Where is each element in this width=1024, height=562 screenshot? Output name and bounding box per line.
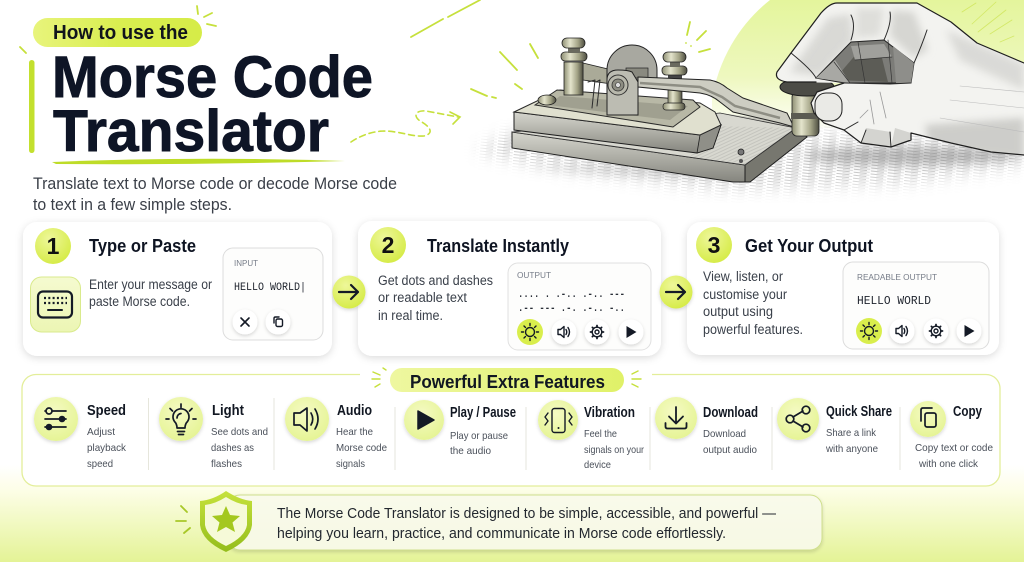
button: clear xyxy=(232,310,258,334)
step 2 text: or readable text xyxy=(378,290,467,305)
feature: quick share: with anyone xyxy=(825,443,878,455)
feature: play pause: Play / Pause xyxy=(450,405,516,421)
output box: .... . .-.. .-.. --- xyxy=(518,289,625,301)
bottom summary banner xyxy=(176,491,822,552)
step 3 heading: Get Your Output xyxy=(745,236,873,256)
output box: OUTPUT xyxy=(517,270,551,280)
banner text xyxy=(277,506,776,542)
feature: vibration: Vibration xyxy=(584,405,635,421)
step 3 text: output using xyxy=(703,304,773,319)
feature: copy xyxy=(910,401,993,470)
icon: keyboard xyxy=(30,277,80,332)
readable output box: HELLO WORLD xyxy=(857,294,931,308)
feature: quick share: Share a link xyxy=(826,427,877,439)
title block xyxy=(20,6,460,214)
accent bar xyxy=(29,60,34,153)
pill heading: how to use the xyxy=(33,18,202,47)
button: sound xyxy=(890,318,914,344)
feature: download: Download xyxy=(703,428,746,440)
subtitle: to text in a few simple steps. xyxy=(33,196,232,214)
arrow 1 xyxy=(332,276,366,308)
step 2 card xyxy=(358,221,661,356)
step 3 card xyxy=(687,222,999,355)
output box: .-- --- .-. .-.. -.. xyxy=(518,303,625,315)
icon: shield with star xyxy=(200,491,252,552)
subtitle: Translate text to Morse code or decode Morse code xyxy=(33,175,397,193)
step 2 text xyxy=(378,273,493,323)
telegraph key xyxy=(512,38,807,182)
button: light active xyxy=(517,319,543,345)
feature: speed: playback xyxy=(87,442,127,454)
feature: light: flashes xyxy=(211,458,242,470)
step 2 text: in real time. xyxy=(378,308,443,323)
hand shading xyxy=(925,118,1024,160)
button: copy xyxy=(266,310,290,334)
number badge 2 xyxy=(370,227,406,263)
feature: play pause: Play or pause xyxy=(450,430,508,442)
input box: INPUT xyxy=(234,258,258,268)
spark near pill xyxy=(20,6,216,53)
feature: light: dashes as xyxy=(211,442,254,454)
feature: download: Download xyxy=(703,405,758,421)
readable output box: READABLE OUTPUT xyxy=(857,272,937,282)
main title: Translator xyxy=(53,99,329,164)
feature: copy: Copy text or code xyxy=(915,442,993,454)
step 1 text: paste Morse code. xyxy=(89,294,190,309)
feature: light xyxy=(159,397,268,470)
table hatching xyxy=(480,126,1024,198)
number badge 2: 2 xyxy=(382,232,394,258)
number badge 1: 1 xyxy=(47,233,60,259)
hero illustration: telegraph key and hand xyxy=(411,0,1024,203)
feature: light: Light xyxy=(212,403,244,419)
input box: HELLO WORLD| xyxy=(234,282,306,294)
heading sparks xyxy=(372,368,641,387)
feature: speed: Adjust xyxy=(87,426,115,438)
sparks around key xyxy=(411,0,710,98)
banner text: The Morse Code Translator is designed to be simple, accessible, and powerful — xyxy=(277,506,776,522)
banner text: helping you learn, practice, and communicate in Morse code effortlessly. xyxy=(277,526,726,542)
feature: audio: signals xyxy=(336,458,365,470)
feature: quick share xyxy=(777,398,892,455)
step 2 heading: Translate Instantly xyxy=(427,236,569,256)
main title xyxy=(52,45,373,164)
feature: audio: Morse code xyxy=(336,442,387,454)
arrow 2 xyxy=(660,276,692,308)
number badge 1 xyxy=(35,228,71,264)
output box xyxy=(508,263,651,350)
step 1 heading: Type or Paste xyxy=(89,236,196,256)
dashed arrow xyxy=(351,111,460,142)
feature: light: See dots and xyxy=(211,426,268,438)
feature: quick share: Quick Share xyxy=(826,404,892,420)
feature: play pause: the audio xyxy=(450,445,491,457)
button: play xyxy=(956,318,982,344)
feature: speed: Speed xyxy=(87,403,126,419)
features heading pill: Powerful Extra Features xyxy=(410,372,605,392)
button: sound xyxy=(552,320,576,344)
feature: audio xyxy=(285,397,387,470)
step 3 text: View, listen, or xyxy=(703,269,783,284)
step 3 text: customise your xyxy=(703,287,787,302)
subtitle xyxy=(33,175,397,214)
feature: copy: Copy xyxy=(953,404,982,420)
brush underline xyxy=(52,159,345,164)
feature: vibration: Feel the xyxy=(584,428,617,440)
banner sparks xyxy=(176,506,190,533)
step 1 text xyxy=(89,277,212,309)
input box xyxy=(223,248,323,340)
number badge 3 xyxy=(696,227,732,263)
feature: speed xyxy=(34,397,127,470)
number badge 3: 3 xyxy=(708,232,720,258)
feature: copy: with one click xyxy=(918,458,979,470)
button: settings xyxy=(584,320,610,344)
knob xyxy=(780,78,834,136)
step 3 text xyxy=(703,269,803,337)
feature: audio: Hear the xyxy=(336,426,373,438)
button: play xyxy=(618,320,644,344)
feature: vibration: device xyxy=(584,459,611,471)
main title: Morse Code xyxy=(52,45,373,110)
feature: vibration xyxy=(538,400,644,471)
features panel xyxy=(22,368,1000,486)
step 2 text: Get dots and dashes xyxy=(378,273,493,288)
feature: speed: speed xyxy=(87,458,113,470)
feature: play pause xyxy=(404,400,516,457)
feature: vibration: signals on your xyxy=(584,444,644,456)
hand xyxy=(776,3,1024,160)
pill heading: how to use the: How to use the xyxy=(53,22,188,44)
feature: download: output audio xyxy=(703,444,757,456)
step 1 text: Enter your message or xyxy=(89,277,212,292)
step 1 card xyxy=(23,222,332,356)
button: settings xyxy=(924,318,948,344)
button: light active xyxy=(856,318,882,344)
step 3 text: powerful features. xyxy=(703,322,803,337)
readable output box xyxy=(843,262,989,349)
feature: download xyxy=(655,397,758,456)
feature: audio: Audio xyxy=(337,403,372,419)
